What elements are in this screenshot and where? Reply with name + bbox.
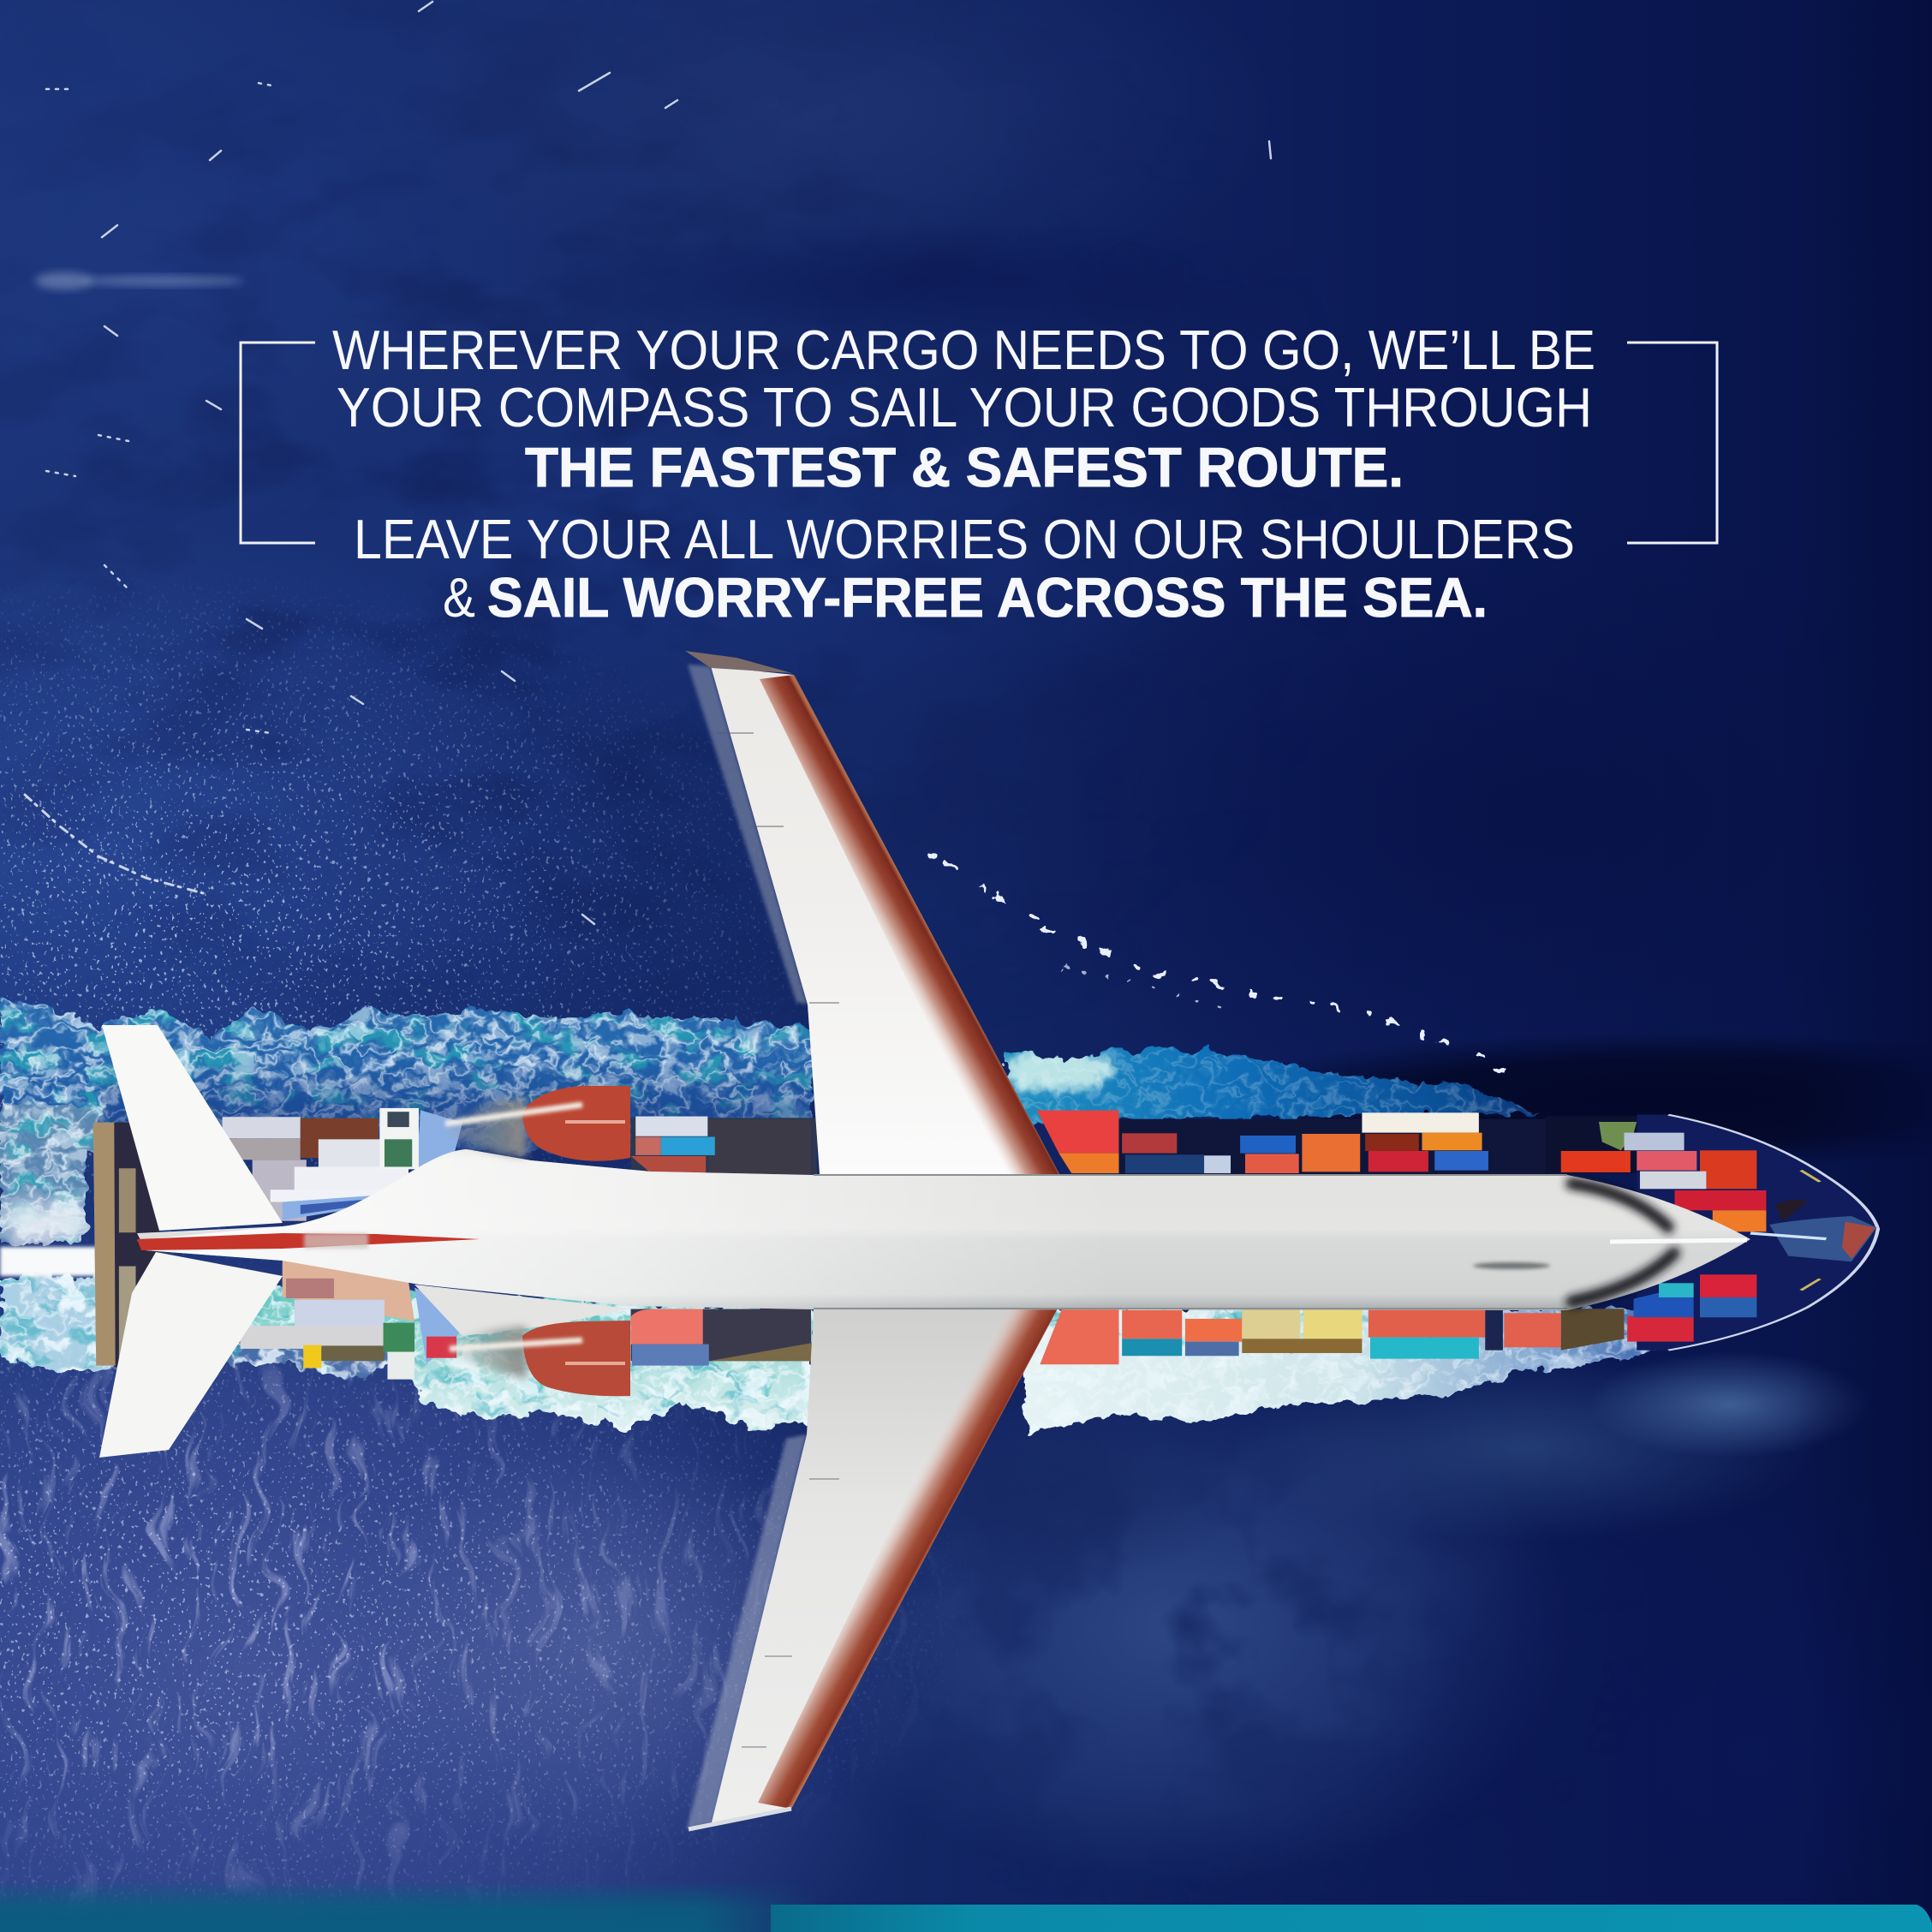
ship: stern deck and superstructure	[93, 1108, 817, 1380]
text line 5 bold: SAIL WORRY-FREE ACROSS THE SEA.	[487, 566, 1488, 629]
ship: mid containers behind engines, upper	[631, 1117, 817, 1174]
airplane: lower wing	[687, 1309, 1058, 1829]
bracket: right	[1627, 343, 1717, 543]
ship: bow hull	[1637, 1115, 1878, 1351]
text line 2: YOUR COMPASS TO SAIL YOUR GOODS THROUGH	[337, 376, 1592, 438]
text line 5 ampersand: &	[443, 566, 475, 629]
ship: bow detail	[1750, 1171, 1877, 1291]
wake: foam, lower left	[0, 1276, 814, 1439]
wake: water, upper right	[1002, 1045, 1554, 1126]
headline text	[332, 319, 1595, 629]
ship: rear containers and bridge, lower	[241, 1260, 462, 1380]
wake: white streak behind stern	[0, 1247, 98, 1276]
text line 4: LEAVE YOUR ALL WORRIES ON OUR SHOULDERS	[354, 508, 1575, 570]
airplane: fuselage	[137, 1149, 1750, 1310]
airplane: lower engine strut	[414, 1285, 630, 1336]
bottom teal band	[0, 1880, 1932, 1932]
airplane	[99, 651, 1750, 1829]
airplane: nose highlight	[1610, 1240, 1747, 1242]
wake: foam, upper left	[0, 993, 814, 1250]
ship: upper container rows	[1037, 1111, 1766, 1231]
wake: sparkling wave crest along the bow	[929, 852, 1520, 1075]
airplane: underside door	[1473, 1262, 1550, 1269]
airplane: upper wing	[685, 651, 1059, 1174]
airplane: cockpit windows	[1571, 1184, 1674, 1302]
ship: lower container rows	[1040, 1274, 1756, 1364]
airplane: red stripe on tail	[137, 1233, 480, 1250]
ship: mid containers behind engines, lower	[631, 1309, 814, 1366]
airplane: upper tail fin	[102, 1025, 283, 1231]
ship: rear containers and bridge, upper	[223, 1108, 462, 1221]
text line 1: WHEREVER YOUR CARGO NEEDS TO GO, WE’LL BE	[332, 319, 1595, 381]
ship: stern plank	[93, 1123, 159, 1367]
airplane: lower engine	[445, 1321, 630, 1396]
text line 3: THE FASTEST & SAFEST ROUTE.	[525, 436, 1404, 498]
airplane: lower tail fin	[99, 1252, 283, 1458]
wake: foam, lower right	[1019, 1306, 1679, 1439]
bracket: left	[241, 343, 315, 543]
ship: forward hull and containers	[1037, 1111, 1878, 1364]
airplane: upper engine	[445, 1086, 630, 1161]
